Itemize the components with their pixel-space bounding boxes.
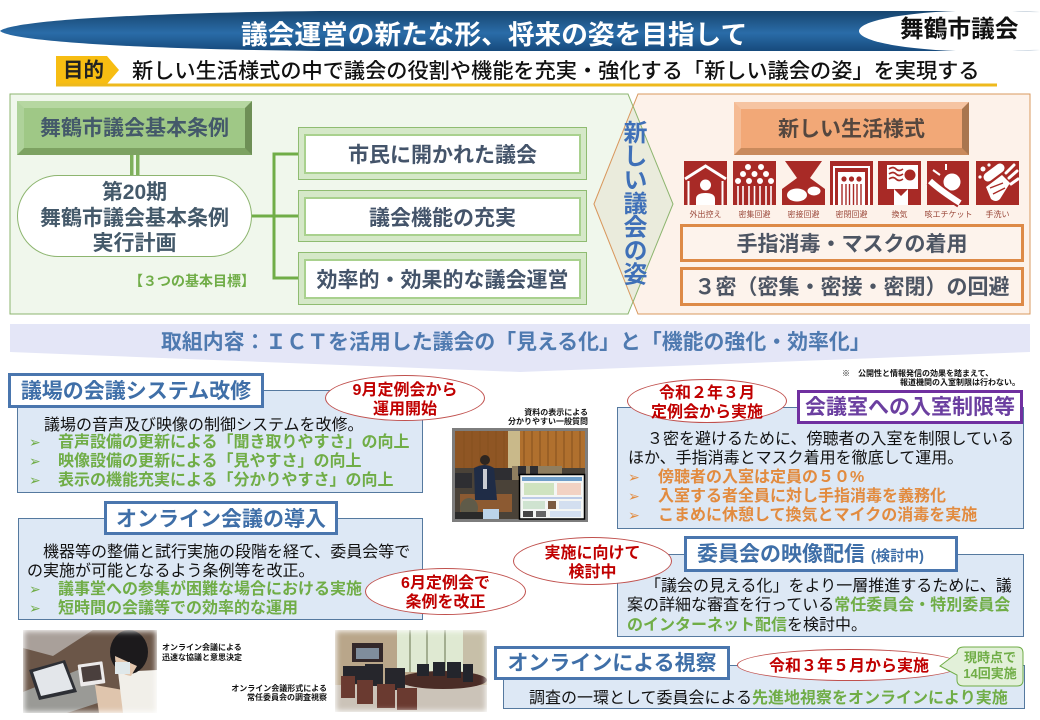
section text: 「議会の見える化」をより一層推進するために、議 bbox=[645, 578, 1012, 595]
panel: 議場の会議システム改修: 音声設備の更新による「聞き取りやすさ」の向上 bbox=[58, 434, 410, 451]
plan pill bbox=[17, 175, 252, 257]
panel: 議場の会議システム改修 bbox=[8, 373, 485, 493]
central hexagon: 新しい議会の姿: 新しい議会の姿 bbox=[619, 120, 646, 285]
icon: stay home bbox=[684, 161, 727, 219]
callout oval: 令和２年３月 bbox=[659, 385, 755, 402]
icon: hand washing bbox=[976, 161, 1019, 219]
basic goals label: 【３つの基本目標】 bbox=[129, 273, 255, 289]
panel: オンライン会議の導入: の実施が可能となるよう条例等を改正。 bbox=[27, 563, 315, 580]
panel: 会議室への入室制限等: ➢ bbox=[628, 489, 640, 505]
goal 3: 効率的・効果的な議会運営 bbox=[316, 269, 568, 292]
panel: 新しい生活様式 bbox=[594, 94, 1030, 314]
title band bbox=[0, 11, 1038, 51]
section title: オンラインによる視察 bbox=[507, 652, 717, 675]
caption: online meeting: オンライン会議による bbox=[162, 643, 242, 652]
callout oval: 運用開始 bbox=[373, 401, 437, 418]
icon: avoid closed spaces bbox=[830, 161, 873, 219]
panel: オンライン会議の導入: ➢ bbox=[29, 601, 41, 617]
panel: オンライン会議の導入: ➢ bbox=[29, 582, 41, 598]
caption: online meeting bbox=[162, 643, 242, 662]
panel: 会議室への入室制限等 bbox=[617, 379, 1024, 529]
panel: 会議室への入室制限等: こまめに休憩して換気とマイクの消毒を実施 bbox=[658, 507, 977, 524]
caption: online committee: オンライン会議形式による bbox=[231, 684, 327, 693]
callout oval: 6月定例会で bbox=[401, 575, 490, 592]
ordinance box: 舞鶴市議会基本条例 bbox=[40, 117, 229, 140]
icon: ventilation: 換気 bbox=[892, 209, 908, 219]
icon: avoid closed spaces: 密閉回避 bbox=[836, 209, 868, 219]
icon row: infection prevention bbox=[684, 161, 1020, 219]
purpose statement: 新しい生活様式の中で議会の役割や機能を充実・強化する「新しい議会の姿」を実現する bbox=[132, 60, 980, 83]
note: press access: 報道機関の入室制限は行わない。 bbox=[900, 378, 1020, 387]
icon: hand washing: 手洗い bbox=[986, 209, 1010, 219]
icon: stay home: 外出控え bbox=[690, 209, 722, 219]
callout oval: 9月定例会から bbox=[353, 382, 457, 399]
icon: cough etiquette: 咳エチケット bbox=[924, 209, 972, 219]
section title bbox=[8, 373, 264, 408]
callout oval: 実施に向けて bbox=[544, 545, 640, 562]
panel: 委員会の映像配信: 案の詳細な審査を行っている常任委員会・特別委員会 bbox=[627, 597, 1010, 614]
panel: オンラインによる視察 bbox=[494, 646, 1025, 709]
callout oval: 条例を改正 bbox=[405, 594, 486, 611]
panel: 議場の会議システム改修: 映像設備の更新による「見やすさ」の向上 bbox=[58, 453, 362, 470]
icon: avoid close contact: 密接回避 bbox=[788, 209, 820, 219]
section title: 会議室への入室制限等 bbox=[805, 396, 1015, 419]
goal 3 bbox=[298, 252, 587, 305]
section text: ３密を避けるために、傍聴者の入室を制限している bbox=[647, 431, 1014, 448]
section text: 議場の音声及び映像の制御システムを改修。 bbox=[44, 417, 364, 434]
green callout: 現時点で bbox=[964, 650, 1016, 665]
section title bbox=[494, 646, 730, 680]
note: press access: ※ 公開性と情報発信の効果を踏まえて、 bbox=[842, 369, 993, 378]
section banner bbox=[10, 324, 1030, 372]
panel: オンライン会議の導入: 短時間の会議等での効率的な運用 bbox=[58, 600, 298, 617]
panel: 会議室への入室制限等: ほか、手指消毒とマスク着用を徹底して運用。 bbox=[628, 450, 963, 467]
photo: online meeting with tablet bbox=[23, 630, 157, 713]
callout oval bbox=[627, 379, 787, 423]
panel: 会議室への入室制限等: ➢ bbox=[628, 470, 640, 486]
icon: avoid crowds bbox=[733, 161, 776, 219]
plan pill: 舞鶴市議会基本条例 bbox=[40, 206, 229, 230]
panel: 委員会の映像配信: のインターネット配信を検討中。 bbox=[627, 617, 867, 634]
panel: 議場の会議システム改修: ➢ bbox=[29, 473, 41, 489]
lifestyle box: 新しい生活様式 bbox=[778, 118, 925, 141]
plan pill: 実行計画 bbox=[92, 232, 176, 255]
panel: 議場の会議システム改修: ➢ bbox=[29, 454, 41, 470]
note: press access bbox=[842, 369, 1020, 387]
icon: cough etiquette bbox=[924, 161, 972, 219]
caption: online meeting: 迅速な協議と意思決定 bbox=[162, 653, 242, 662]
panel: 会議室への入室制限等: ➢ bbox=[628, 508, 640, 524]
panel: オンライン会議の導入: 議事堂への参集が困難な場合における実施 bbox=[58, 581, 362, 598]
photo: chamber bbox=[452, 428, 588, 522]
organisation name: 舞鶴市議会 bbox=[900, 17, 1018, 43]
section title: 委員会の映像配信 (検討中) bbox=[697, 543, 924, 566]
panel: 議場の会議システム改修: 表示の機能充実による「分かりやすさ」の向上 bbox=[58, 472, 394, 489]
panel: 会議室への入室制限等: 入室する者全員に対し手指消毒を義務化 bbox=[658, 488, 946, 505]
photo: online committee room bbox=[335, 630, 487, 712]
section title bbox=[797, 390, 1023, 424]
caption: online committee: 常任委員会の調査視察 bbox=[247, 693, 327, 702]
section title: オンライン会議の導入 bbox=[116, 508, 326, 531]
section title bbox=[684, 536, 958, 572]
icon: avoid crowds: 密集回避 bbox=[738, 209, 770, 219]
caption: chamber photo bbox=[508, 408, 588, 426]
callout oval: 検討中 bbox=[568, 564, 616, 581]
callout oval bbox=[737, 649, 961, 681]
plan pill: 第20期 bbox=[102, 181, 167, 204]
caption: online committee bbox=[231, 684, 327, 702]
callout oval: 定例会から実施 bbox=[651, 404, 763, 421]
caption: chamber photo: 分かりやすい一般質問 bbox=[508, 417, 588, 426]
three Cs box: ３密（密集・密接・密閉）の回避 bbox=[694, 276, 1010, 299]
central hexagon: 新しい議会の姿 bbox=[594, 106, 674, 302]
section text: 調査の一環として委員会による先進地視察をオンラインにより実施 bbox=[529, 690, 1008, 707]
panel: オンライン会議の導入 bbox=[18, 501, 526, 620]
hand hygiene box: 手指消毒・マスクの着用 bbox=[736, 233, 968, 256]
callout oval: 令和３年５月から実施 bbox=[769, 658, 929, 675]
goal 1: 市民に開かれた議会 bbox=[348, 144, 537, 167]
callout oval bbox=[513, 537, 672, 585]
section banner: 取組内容：ＩＣＴを活用した議会の「見える化」と「機能の強化・効率化」 bbox=[161, 331, 871, 354]
green callout: 14回実施 bbox=[963, 666, 1017, 681]
goal 1 bbox=[298, 127, 587, 180]
section title: 議場の会議システム改修 bbox=[21, 380, 251, 403]
lifestyle box bbox=[734, 102, 969, 155]
panel: 会議室への入室制限等: 傍聴者の入室は定員の５０% bbox=[658, 469, 864, 486]
green callout bbox=[939, 646, 1024, 686]
icon: avoid close contact bbox=[782, 161, 825, 219]
section title bbox=[104, 501, 338, 535]
ordinance box bbox=[17, 101, 252, 155]
purpose tag: 目的 bbox=[63, 59, 104, 82]
goal 2: 議会機能の充実 bbox=[369, 207, 516, 230]
callout oval bbox=[365, 568, 526, 615]
callout oval bbox=[325, 375, 485, 421]
caption: chamber photo: 資料の表示による bbox=[524, 408, 588, 417]
icon: ventilation bbox=[878, 161, 921, 219]
hand hygiene box bbox=[680, 224, 1024, 262]
section text: 機器等の整備と試行実施の段階を経て、委員会等で bbox=[43, 544, 410, 561]
three Cs box bbox=[680, 267, 1024, 306]
panel: 基本条例 bbox=[10, 94, 633, 314]
heading: 議会運営の新たな形、将来の姿を目指して bbox=[241, 20, 747, 50]
panel: 議場の会議システム改修: ➢ bbox=[29, 435, 41, 451]
purpose banner bbox=[56, 56, 997, 86]
goal 2 bbox=[298, 190, 587, 242]
panel: 委員会の映像配信 bbox=[513, 536, 1024, 637]
